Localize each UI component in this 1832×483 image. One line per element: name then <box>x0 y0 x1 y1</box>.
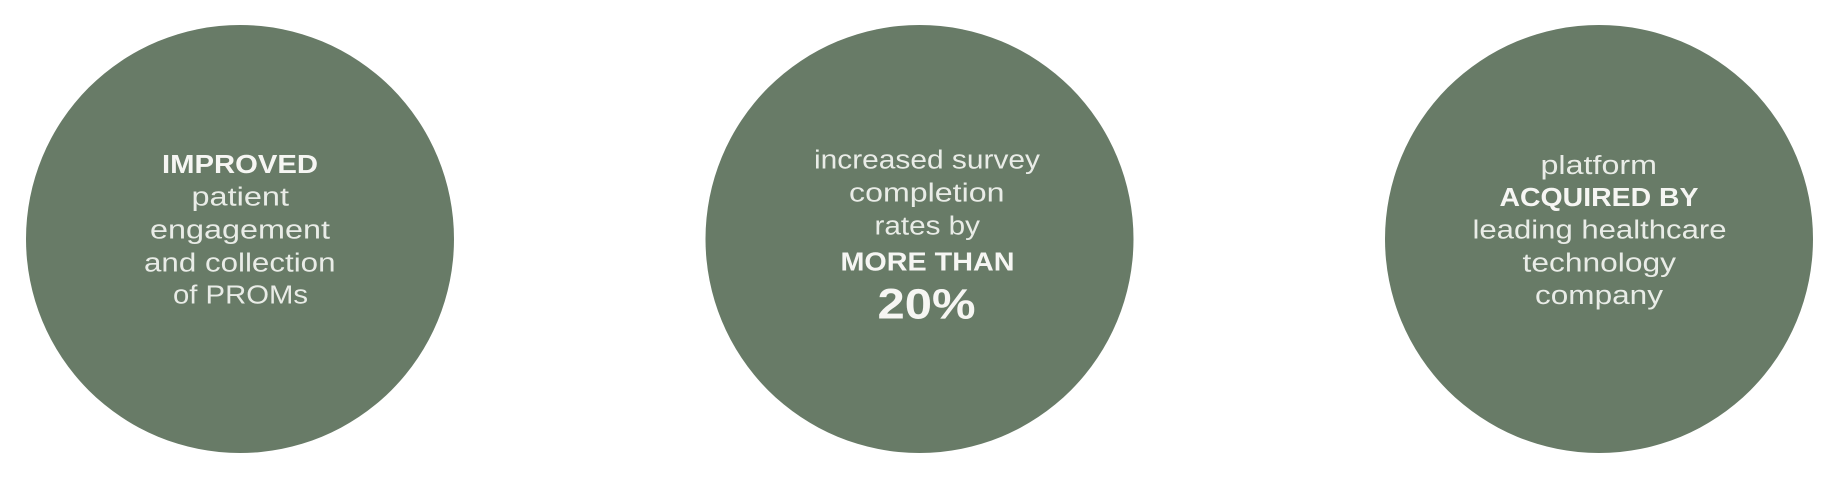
statistic: 20%: 20% <box>878 280 976 328</box>
text block: improved engagement <box>144 151 336 310</box>
circle background 1 <box>26 25 454 453</box>
text block: platform acquisition: company <box>1535 282 1663 310</box>
text block: improved engagement: of PROMs <box>173 282 308 310</box>
text block: platform acquisition <box>1472 152 1726 310</box>
text block: improved engagement: IMPROVED <box>162 151 318 179</box>
text block: improved engagement: patient <box>192 184 289 212</box>
panel: improved patient engagement <box>26 25 454 453</box>
text block: improved engagement: engagement <box>150 216 330 244</box>
text block: survey completion rates <box>814 146 1040 328</box>
text block: platform acquisition: leading healthcare <box>1472 217 1726 245</box>
text block: survey completion rates: rates by <box>874 212 980 240</box>
text block: platform acquisition: technology <box>1522 250 1676 278</box>
text block: improved engagement: and collection <box>144 250 336 278</box>
text block: platform acquisition: ACQUIRED BY <box>1500 184 1698 212</box>
text block: platform acquisition: platform <box>1540 152 1657 180</box>
panel: platform acquired <box>1385 25 1813 453</box>
circle background 3 <box>1385 25 1813 453</box>
text block: survey completion rates: increased survey <box>814 146 1040 174</box>
panel: increased survey completion <box>706 25 1134 453</box>
text block: survey completion rates: completion <box>849 180 1004 208</box>
text block: survey completion rates: MORE THAN <box>840 249 1014 277</box>
circle background 2 <box>706 25 1134 453</box>
